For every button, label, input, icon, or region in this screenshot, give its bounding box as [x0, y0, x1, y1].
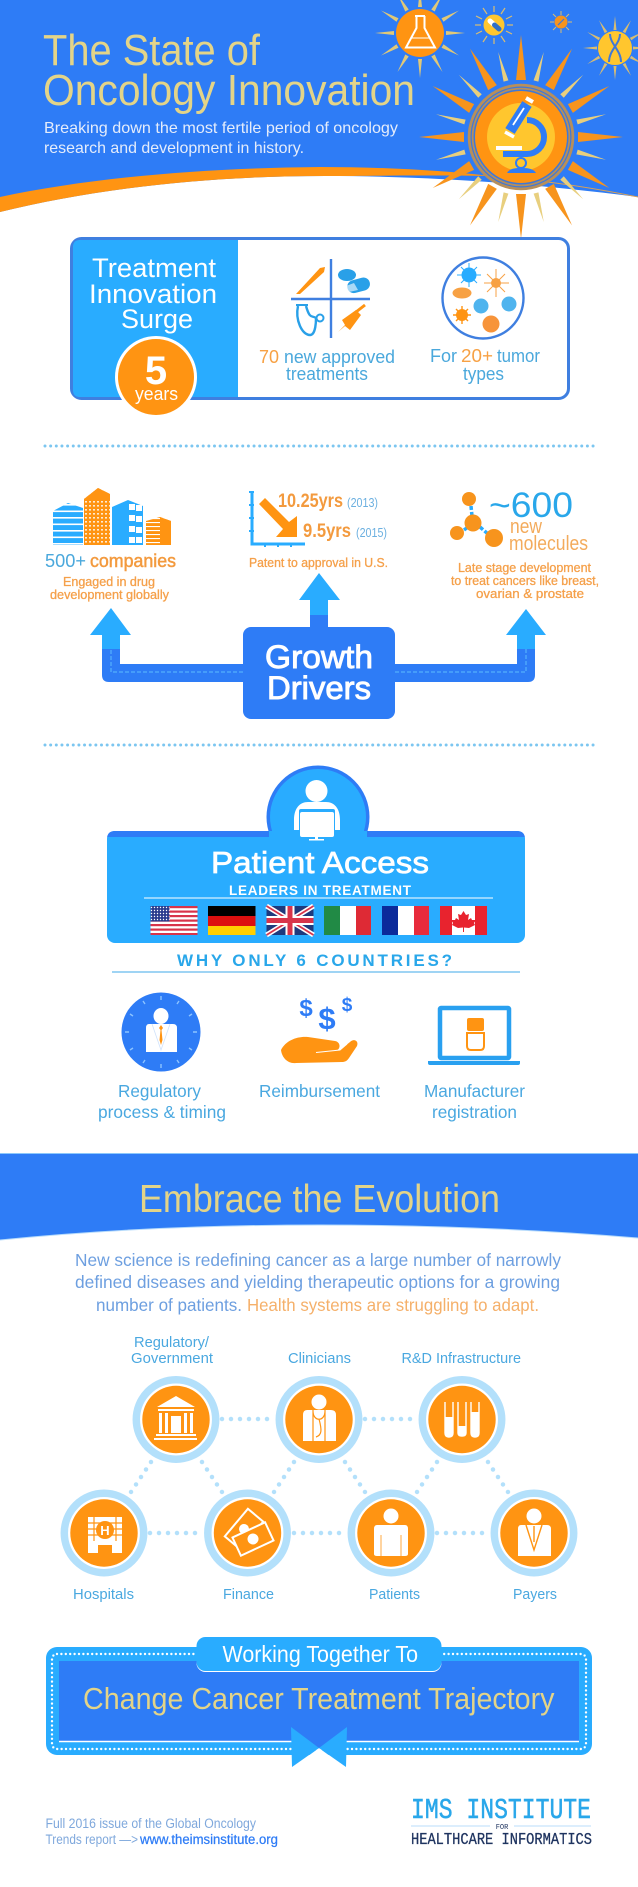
text: 500+ companies	[45, 550, 176, 571]
text: manufacturer registration: registration	[432, 1102, 517, 1122]
labels: bottom row: Payers	[513, 1586, 557, 1603]
text: new science paragraph: Health systems are struggling to adapt.	[247, 1295, 539, 1315]
text: patent to approval: Patent to approval in U.S.	[249, 556, 388, 570]
text: engaged in drug development: Engaged in drug	[63, 575, 155, 589]
icon: pill sun	[475, 6, 513, 44]
text: for 20+ tumor types: 20+	[461, 346, 493, 366]
heading: treatment innovation surge	[89, 253, 217, 334]
text: ~600 new molecules	[489, 486, 588, 555]
text: 500+ companies: 500+	[45, 550, 86, 571]
flag: Canada	[440, 906, 487, 935]
text: manufacturer registration	[424, 1081, 525, 1122]
node: clinicians	[279, 1380, 359, 1459]
heading: treatment innovation surge: Surge	[121, 304, 193, 334]
tab: working together to: Working Together To	[222, 1641, 418, 1667]
icon: DNA sun	[583, 16, 638, 80]
logo: IMS Institute: IMS INSTITUTE	[411, 1794, 591, 1827]
flag: France	[382, 906, 429, 935]
heading: treatment innovation surge: Innovation	[89, 279, 217, 309]
badge: 5 years	[115, 336, 197, 418]
labels: top row: R&D Infrastructure	[402, 1350, 521, 1367]
text: new science paragraph	[75, 1250, 561, 1315]
text: ~600 new molecules: new	[510, 516, 542, 538]
box: growth drivers: Drivers	[267, 670, 371, 706]
text: regulatory process and timing: process & timing	[98, 1102, 226, 1122]
labels: top row: Clinicians	[288, 1350, 351, 1367]
labels: top row	[131, 1334, 521, 1367]
footer text: Full 2016 issue of the Global Oncology	[46, 1816, 256, 1831]
text: late stage development: ovarian & prostate	[476, 587, 584, 601]
text: regulatory process and timing	[98, 1081, 226, 1122]
title	[43, 26, 415, 115]
icon: reimbursement hand	[281, 995, 357, 1063]
text: for 20+ tumor types: For	[430, 346, 457, 366]
heading: treatment innovation surge: Treatment	[92, 253, 217, 283]
title: Oncology Innovation	[43, 66, 415, 115]
node: patients	[351, 1493, 431, 1573]
node: R&D infrastructure	[422, 1380, 502, 1459]
labels: bottom row: Finance	[223, 1586, 274, 1603]
panel: patient access	[107, 766, 525, 943]
text: manufacturer registration: Manufacturer	[424, 1081, 525, 1101]
banner: working together	[46, 1637, 592, 1767]
subtitle: Breaking down the most fertile period of oncology	[44, 120, 398, 137]
labels: bottom row: Hospitals	[73, 1586, 134, 1603]
text: ~600 new molecules: ~600	[489, 486, 573, 525]
text: 70 new approved treatments: treatments	[286, 364, 368, 384]
heading: why only 6 countries: WHY ONLY 6 COUNTRIES?	[177, 951, 452, 970]
text: for 20+ tumor types	[430, 346, 540, 384]
icon: buildings	[53, 488, 171, 545]
arrow: center	[299, 573, 340, 628]
flag: USA	[150, 906, 198, 935]
subtitle: research and development in history.	[44, 140, 304, 157]
icon: person at laptop	[294, 780, 340, 840]
title: The State of	[43, 26, 261, 75]
node: hospitals: H	[100, 1523, 110, 1538]
icon: ribbon bow	[291, 1727, 347, 1767]
text: late stage development: Late stage development	[458, 561, 592, 575]
icon: reimbursement hand: $	[342, 995, 353, 1016]
heading: patient access: Patient Access	[211, 845, 429, 880]
chart: patent to approval	[249, 491, 387, 547]
text: engaged in drug development: development globally	[50, 588, 170, 602]
logo: IMS Institute	[411, 1794, 592, 1850]
icon: reimbursement hand: $	[299, 995, 313, 1022]
arrow: left	[90, 608, 243, 682]
subtitle	[44, 120, 398, 157]
text: new science paragraph: defined diseases and yielding therapeutic options for a growing	[75, 1272, 560, 1292]
node: hospitals	[64, 1493, 144, 1573]
icon: regulatory clock	[122, 992, 200, 1072]
connectors	[129, 1419, 510, 1533]
icon: treatment quadrant	[291, 259, 371, 338]
chart: patent to approval: (2015)	[356, 525, 387, 540]
text: regulatory process and timing: Regulatory	[118, 1081, 201, 1101]
box: growth drivers: Growth	[265, 639, 373, 675]
footer text	[46, 1816, 278, 1847]
text: new science paragraph: number of patients.	[96, 1295, 242, 1315]
subheading: leaders in treatment: LEADERS IN TREATMENT	[229, 883, 412, 898]
text: ~600 new molecules: molecules	[509, 533, 588, 555]
flag: UK	[266, 906, 314, 935]
logo: IMS Institute: FOR	[496, 1824, 509, 1832]
text: for 20+ tumor types: tumor	[497, 346, 540, 366]
icon: tumor petri dish	[442, 258, 524, 338]
icon: manufacturer laptop	[428, 1008, 520, 1065]
text: reimbursement: Reimbursement	[259, 1081, 380, 1101]
chart: patent to approval: 9.5yrs	[303, 521, 351, 542]
text: 70 new approved treatments: 70	[259, 347, 279, 367]
labels: top row: Regulatory/	[134, 1334, 210, 1351]
icon: microscope sun	[419, 35, 623, 239]
node: regulatory government	[136, 1380, 216, 1459]
text: for 20+ tumor types: types	[463, 364, 504, 384]
badge: 5 years: 5	[145, 349, 167, 393]
text: change cancer treatment trajectory: Change Cancer Treatment Trajectory	[83, 1682, 555, 1716]
footer text: Trends report —>	[46, 1832, 138, 1847]
badge: 5 years: years	[135, 384, 178, 404]
arrow: right	[395, 609, 546, 682]
box: growth drivers	[243, 627, 395, 719]
text: new science paragraph: New science is redefining cancer as a large number of narrowly	[75, 1250, 561, 1270]
chart: patent to approval: (2013)	[347, 495, 378, 510]
node: payers	[494, 1493, 574, 1573]
text: late stage development	[451, 561, 599, 601]
text: late stage development: to treat cancers like breast,	[451, 574, 599, 588]
footer text: www.theimsinstitute.org	[139, 1832, 278, 1847]
labels: bottom row	[73, 1586, 557, 1603]
labels: bottom row: Patients	[369, 1586, 420, 1603]
flag: Germany	[208, 906, 256, 935]
text: 500+ companies: companies	[90, 550, 176, 571]
network: stakeholders	[64, 1380, 574, 1573]
logo: IMS Institute: HEALTHCARE INFORMATICS	[411, 1831, 592, 1850]
flag: Italy	[324, 906, 371, 935]
band: embrace the evolution: Embrace the Evolution	[139, 1178, 500, 1221]
labels: top row: Government	[131, 1350, 214, 1367]
text: 70 new approved treatments	[259, 347, 395, 384]
band: embrace the evolution	[0, 1153, 638, 1240]
icon: reimbursement hand: $	[318, 1001, 336, 1036]
text: 70 new approved treatments: new approved	[284, 347, 395, 367]
icon: tablet sun	[550, 11, 572, 33]
node: finance	[208, 1493, 287, 1573]
icon: flask sun	[375, 0, 465, 78]
header background	[0, 0, 638, 212]
tab: working together to	[196, 1637, 442, 1672]
panel: growth drivers	[45, 486, 599, 719]
chart: patent to approval: 10.25yrs	[278, 491, 343, 512]
panel: treatment innovation surge	[72, 238, 568, 418]
icon: molecule	[450, 492, 503, 547]
text: engaged in drug development	[50, 575, 170, 602]
